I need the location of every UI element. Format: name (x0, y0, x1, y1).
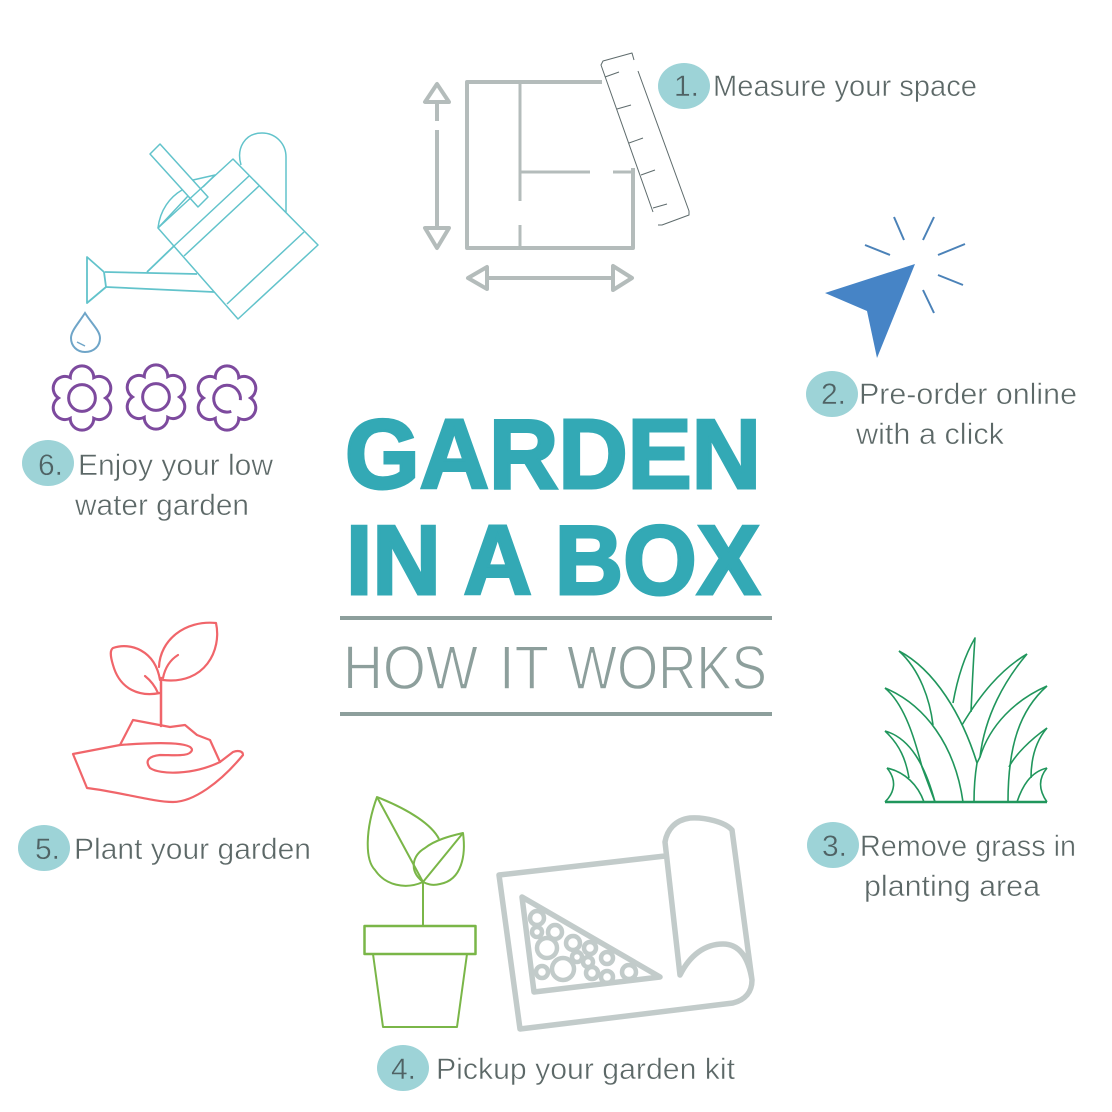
step 5 label: 5. (35, 833, 60, 866)
icon: potted seedling (364, 797, 476, 1027)
step 6 label: 6. (38, 449, 63, 482)
step 3 label: 3. (822, 830, 847, 863)
subtitle: how it works (340, 616, 772, 716)
title (345, 399, 761, 615)
step 5 label (18, 825, 311, 871)
icon: three flowers (53, 365, 256, 430)
step 1 label: Measure your space (713, 70, 977, 103)
icon: cursor click (825, 217, 965, 358)
step 1 label (658, 63, 977, 109)
step 6 label: Enjoy your low (78, 449, 273, 482)
subtitle: how it works: HOW (343, 634, 478, 703)
title: GARDEN (345, 399, 761, 509)
icon: water drop (71, 313, 100, 352)
step 3 label (807, 822, 1076, 903)
icon: grass (885, 638, 1047, 802)
step 3 label: planting area (864, 870, 1040, 903)
icon: floor plan with ruler (425, 53, 689, 290)
subtitle: how it works: IT (499, 634, 549, 703)
title: IN A BOX (346, 505, 760, 615)
step 4 label: Pickup your garden kit (436, 1053, 736, 1086)
step 3 label: Remove grass in (860, 830, 1076, 863)
step 2 label: 2. (821, 378, 846, 411)
step 6 label (22, 440, 273, 522)
step 6 label: water garden (74, 489, 249, 522)
icon: seedling in hand (73, 623, 243, 802)
step 2 label: with a click (855, 418, 1005, 451)
subtitle: how it works: WORKS (567, 634, 767, 703)
step 4 label (377, 1045, 736, 1091)
step 2 label (806, 371, 1077, 451)
step 5 label: Plant your garden (74, 833, 311, 866)
icon: garden plan map (499, 818, 752, 1029)
step 2 label: Pre-order online (859, 378, 1077, 411)
step 4 label: 4. (391, 1053, 416, 1086)
icon: watering can (87, 133, 318, 319)
step 1 label: 1. (674, 70, 699, 103)
